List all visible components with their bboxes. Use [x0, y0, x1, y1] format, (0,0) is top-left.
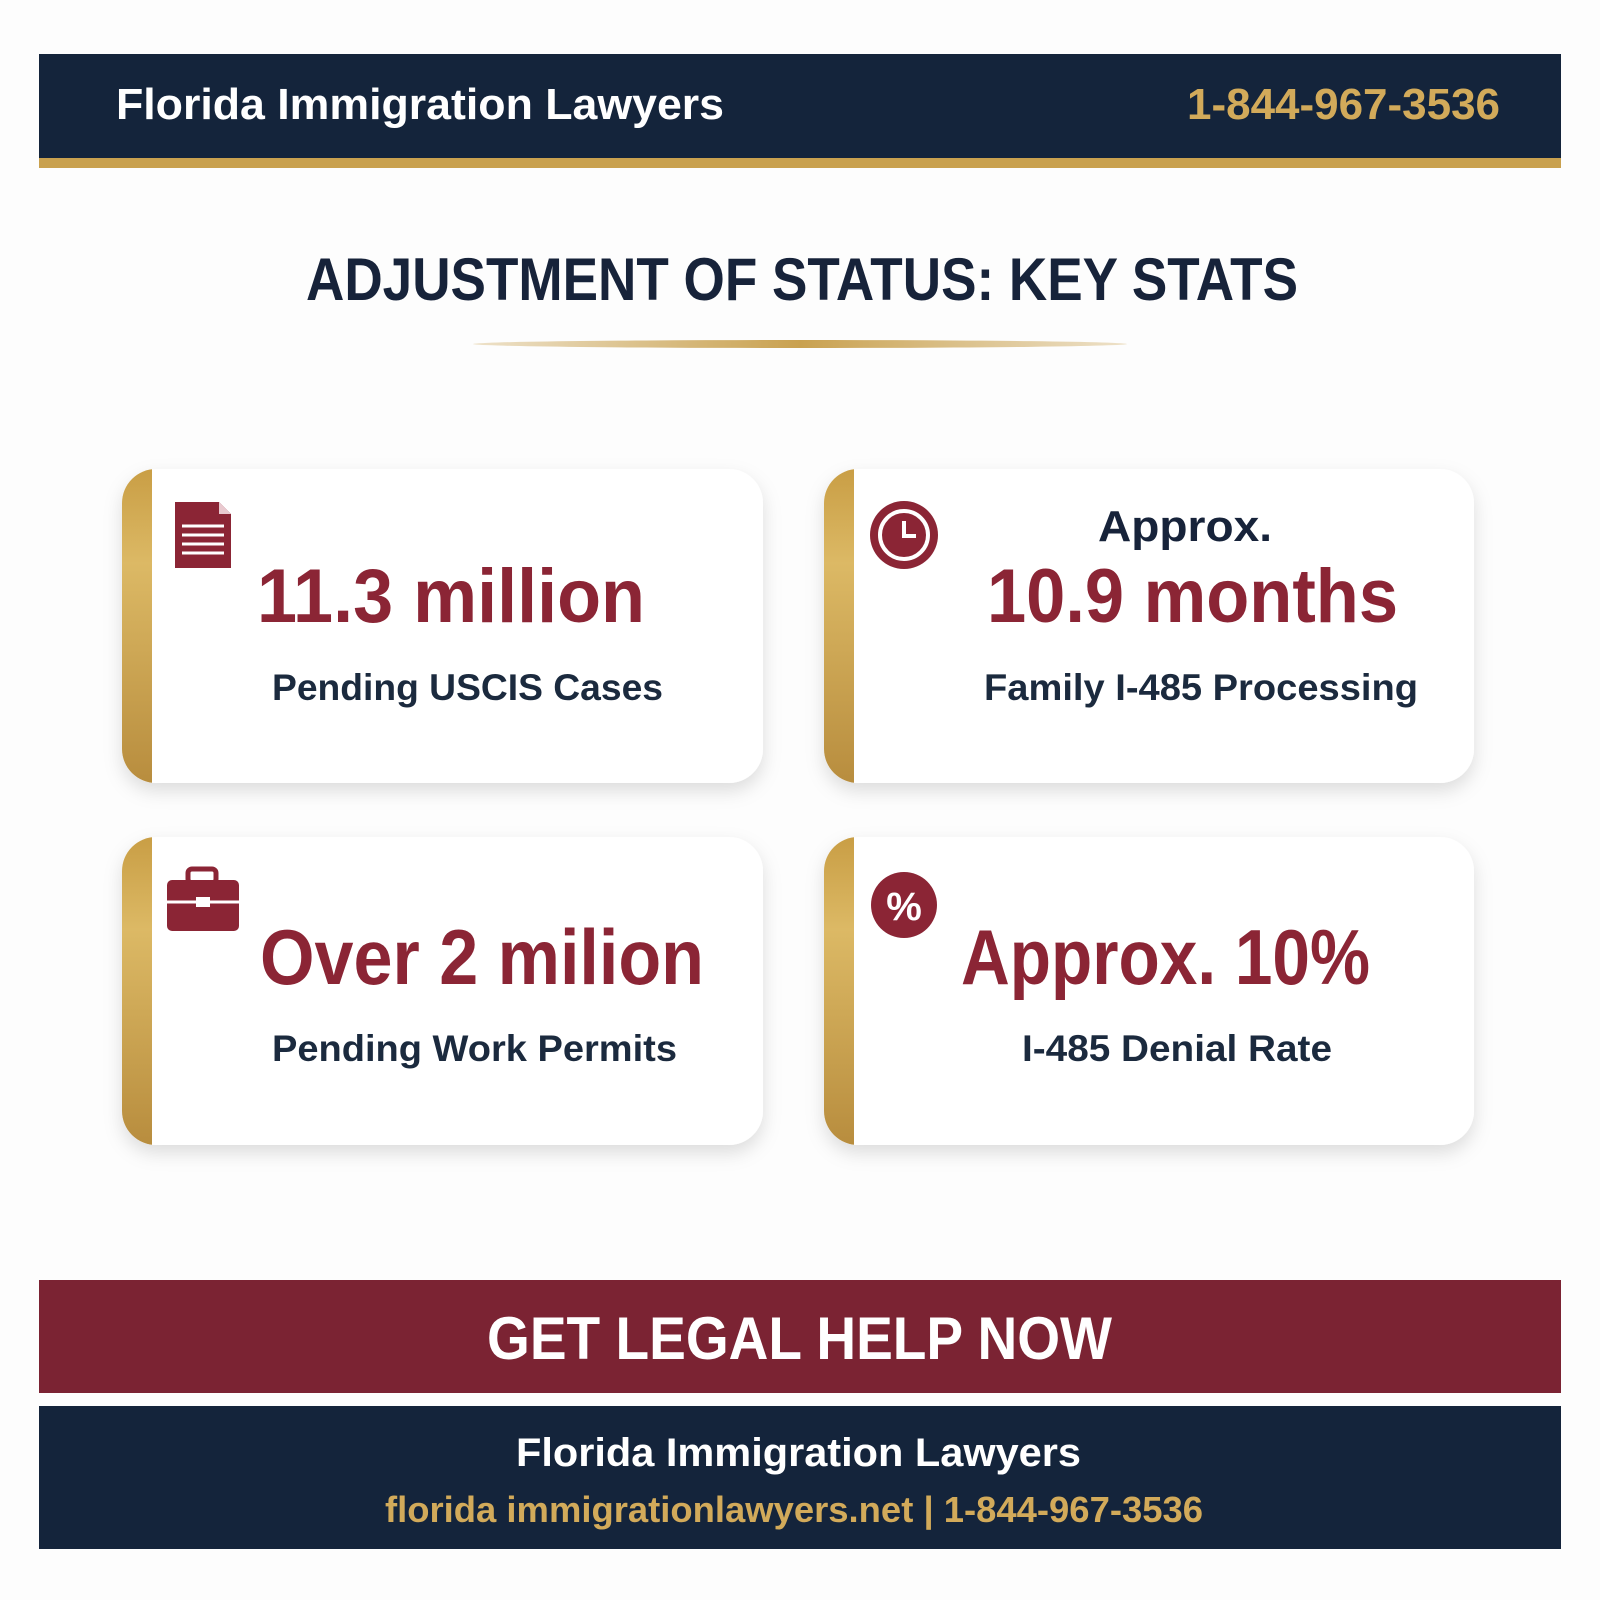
stat label: Pending Work Permits: [272, 1028, 677, 1069]
stat number: Over 2 milion: [260, 913, 704, 1001]
title: ADJUSTMENT OF STATUS: KEY STATS: [306, 246, 1298, 313]
footer firm name: Florida Immigration Lawyers: [516, 1431, 1081, 1475]
header firm name: Florida Immigration Lawyers: [116, 80, 724, 129]
footer contact: florida immigrationlawyers.net | 1-844-967-3536: [385, 1489, 1203, 1531]
icon: percent: [871, 872, 937, 938]
footer: [39, 1406, 1561, 1549]
approx label: Approx.: [1098, 502, 1272, 551]
icon: document: [175, 502, 231, 568]
panel: processing time: [824, 469, 1474, 783]
title underline: [473, 340, 1127, 348]
icon: clock: [870, 501, 938, 569]
panel: pending USCIS cases: [122, 469, 763, 783]
stat number: 11.3 million: [257, 554, 645, 639]
CTA banner: [39, 1280, 1561, 1393]
icon: briefcase: [167, 869, 239, 931]
stat label: I-485 Denial Rate: [1022, 1028, 1332, 1069]
header phone: 1-844-967-3536: [1187, 80, 1500, 129]
panel: denial rate: [824, 837, 1474, 1145]
panel: work permits: [122, 837, 763, 1145]
stat label: Pending USCIS Cases: [272, 667, 663, 708]
icon: percent: %: [886, 885, 922, 929]
CTA banner: GET LEGAL HELP NOW: [487, 1305, 1112, 1372]
header bar: [39, 54, 1561, 168]
stat number: 10.9 months: [987, 554, 1398, 639]
stat label: Family I-485 Processing: [984, 667, 1418, 708]
stat number: Approx. 10%: [961, 913, 1370, 1001]
